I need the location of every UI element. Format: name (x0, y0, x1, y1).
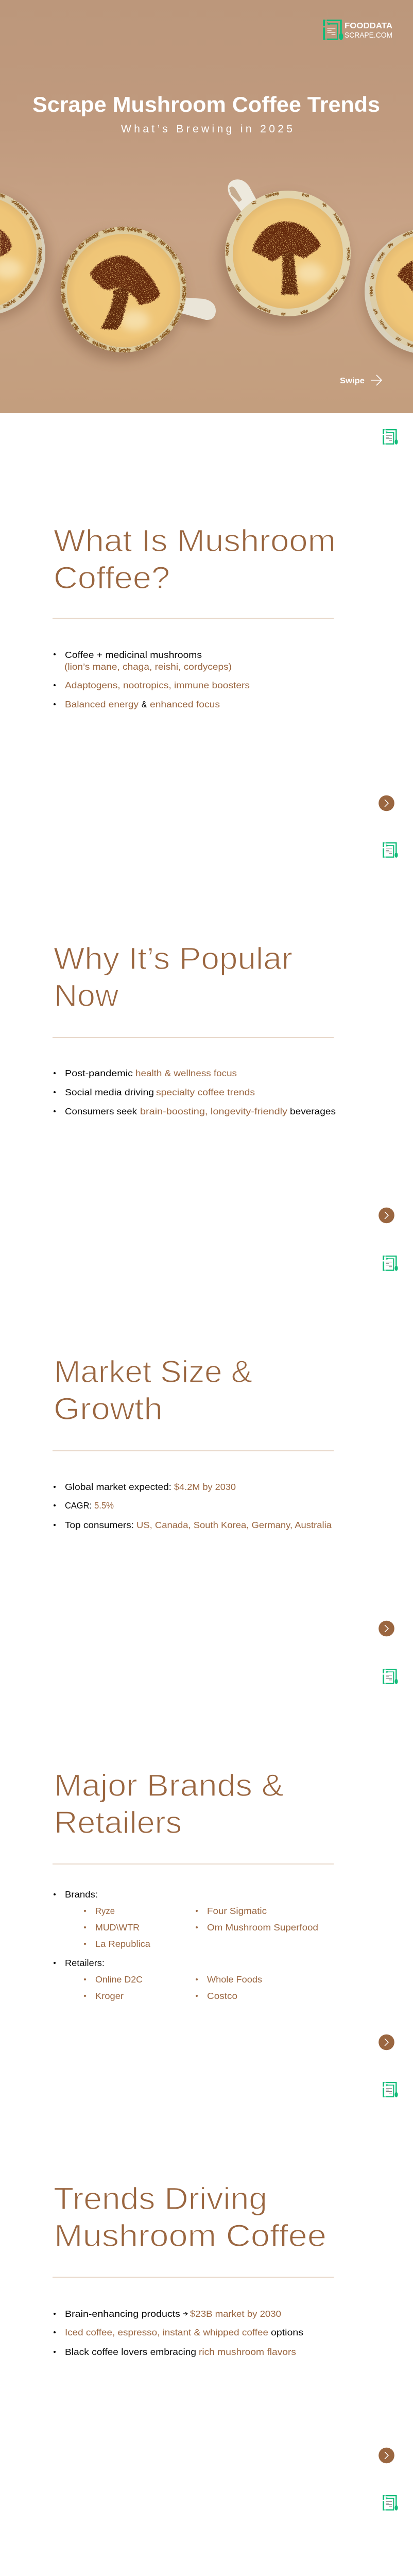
panel: trends driving mushroom coffee (53, 2082, 398, 2464)
icon: logo mark (383, 2495, 398, 2511)
panel: what is mushroom coffee (53, 429, 398, 811)
brands list: Om Mushroom Superfood (207, 1922, 318, 1933)
brands list: Four Sigmatic (207, 1906, 267, 1916)
icon: logo mark (383, 1256, 398, 1271)
swipe prompt with arrow (340, 375, 382, 385)
bullet list: Global market expected: (65, 1482, 171, 1492)
arrow button (378, 1208, 394, 1223)
brands list: Ryze (95, 1906, 115, 1916)
heading: Mushroom Coffee (54, 2218, 326, 2253)
icon: logo mark (383, 429, 398, 445)
brand logo: FOODDATA (345, 22, 392, 30)
panel: hero cover (0, 0, 413, 413)
subtitle: What’s Brewing in 2025 (121, 123, 292, 135)
heading: Now (54, 978, 119, 1013)
heading: What Is Mushroom (54, 523, 336, 558)
bullet list: specialty coffee trends (156, 1087, 255, 1097)
bullet list (54, 650, 250, 709)
heading: Major Brands & (54, 1768, 284, 1803)
heading (54, 2181, 326, 2253)
hero background (0, 0, 413, 413)
bullet list: Post-pandemic (65, 1068, 133, 1078)
bullet list: 5.5% (94, 1500, 114, 1511)
bullet list (54, 1068, 336, 1116)
bullet list: US, Canada, South Korea, Germany, Australia (136, 1520, 332, 1530)
heading (54, 523, 336, 595)
panel: why it's popular now (53, 842, 398, 1223)
bullet list: $23B market by 2030 (190, 2309, 281, 2319)
retailers list (54, 1958, 262, 2001)
bullet list: health & wellness focus (135, 1068, 237, 1078)
bullet list: $4.2M by 2030 (174, 1482, 236, 1492)
bullet list: CAGR: (65, 1500, 92, 1511)
bullet list: beverages (290, 1106, 336, 1116)
bullet list: enhanced focus (150, 699, 220, 709)
retailers list: Online D2C (95, 1974, 143, 1985)
bullet list (54, 2309, 303, 2357)
brands list (54, 1889, 318, 1949)
bullet list: Adaptogens, nootropics, immune boosters (65, 680, 250, 690)
bullet list: options (271, 2327, 303, 2337)
icon: logo mark (383, 1669, 398, 1684)
arrow button (378, 795, 394, 811)
bullet list: Consumers seek (65, 1106, 137, 1116)
swipe prompt with arrow: Swipe (340, 377, 365, 385)
retailers list: Kroger (95, 1991, 124, 2001)
heading: Why It’s Popular (54, 941, 292, 976)
bullet list: Social media driving (65, 1087, 154, 1097)
cup: far left (0, 190, 48, 320)
heading (54, 941, 292, 1013)
bullet list: Coffee + medicinal mushrooms (65, 650, 202, 660)
bullet list: Top consumers: (65, 1520, 134, 1530)
illustration: four mushroom latte cups (0, 179, 413, 360)
cup: centre left with handle (56, 227, 216, 360)
bullet list: Black coffee lovers embracing (65, 2347, 196, 2357)
heading: Market Size & (54, 1354, 252, 1389)
panel: consumer insights (383, 2495, 398, 2511)
retailers list: Whole Foods (207, 1974, 262, 1985)
arrow button (378, 1621, 394, 1636)
bullet list: rich mushroom flavors (199, 2347, 296, 2357)
icon: logo mark (383, 842, 398, 858)
panel: major brands and retailers (53, 1669, 398, 2050)
retailers list: Retailers: (65, 1958, 105, 1968)
bullet list (54, 1482, 332, 1530)
bullet list: Balanced energy (65, 699, 139, 709)
brand logo: SCRAPE.COM (345, 31, 392, 40)
bullet list: (lion’s mane, chaga, reishi, cordyceps) (64, 662, 232, 672)
arrow button (378, 2035, 394, 2050)
heading: Coffee? (54, 561, 170, 595)
retailers list: Costco (207, 1991, 237, 2001)
brands list: La Republica (95, 1939, 150, 1949)
heading: Retailers (54, 1805, 182, 1840)
heading (54, 1354, 252, 1426)
brands list: Brands: (65, 1889, 98, 1900)
icon: logo mark (383, 2082, 398, 2097)
heading: Trends Driving (54, 2181, 267, 2216)
arrow button (378, 2448, 394, 2463)
panel: market size and growth (53, 1256, 398, 1636)
bullet list: Brain-enhancing products (65, 2309, 180, 2319)
bullet list: & (142, 699, 147, 709)
heading (54, 1768, 284, 1840)
cup: far right (364, 227, 413, 359)
brands list: MUD\WTR (95, 1922, 140, 1933)
brand logo (323, 20, 392, 40)
bullet list: brain-boosting, longevity-friendly (140, 1106, 287, 1116)
cup: centre right with handle (220, 179, 351, 324)
heading: Growth (54, 1392, 163, 1426)
bullet list: Iced coffee, espresso, instant & whipped coffee (65, 2327, 268, 2337)
title: Scrape Mushroom Coffee Trends (32, 92, 380, 116)
